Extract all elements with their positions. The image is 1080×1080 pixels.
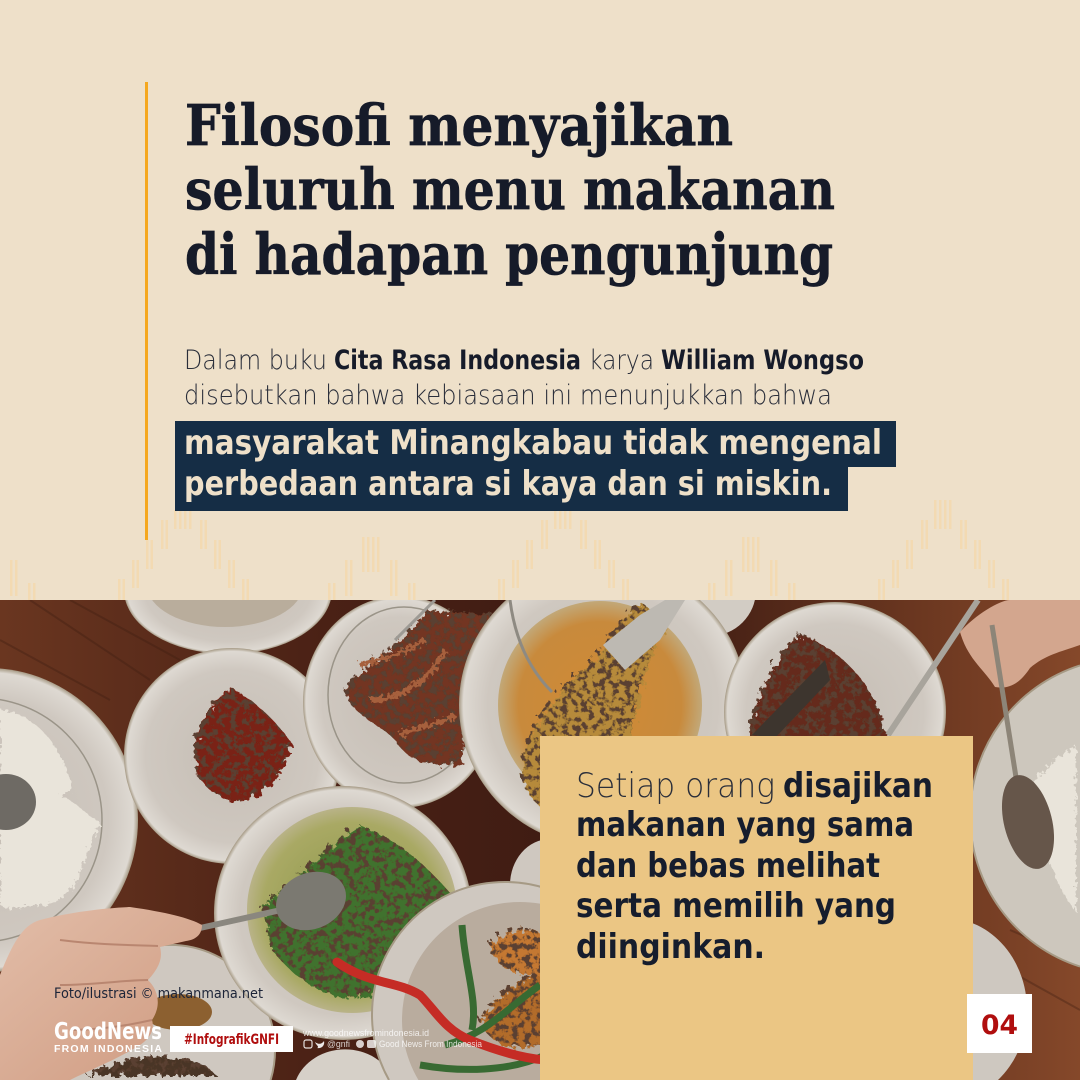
page number [967,994,1032,1053]
intro paragraph: William Wongso [661,345,864,376]
photo: Padang dishes on a wooden table [0,600,1080,1080]
hashtag badge [170,1026,293,1052]
intro paragraph: karya [589,345,654,376]
orange vertical accent bar [145,82,148,540]
plate: fried anchovies [303,596,497,808]
spoon: left hand [201,872,346,931]
plate: top left [125,600,331,652]
intro paragraph [184,345,864,411]
caption panel: serta memilih yang [576,886,896,926]
plate: small behind top [700,600,755,633]
plate: bottom centre small [296,1049,394,1080]
plate: bottom left [65,945,275,1080]
caption panel: disajikan [783,766,933,806]
plate: fish in orange curry [459,600,739,833]
highlighted statement: perbedaan antara si kaya dan si miskin. [184,464,832,504]
page number: 04 [981,1010,1018,1041]
plate: sambal [124,648,340,864]
intro paragraph: Cita Rasa Indonesia [334,345,581,376]
highlighted statement [175,421,896,511]
spoon: right plate [990,624,1054,869]
website and social links [302,1028,483,1050]
caption panel: dan bebas melihat [576,846,880,886]
caption panel [540,736,973,1080]
intro paragraph: Dalam buku [184,345,327,376]
stepped background pattern [0,500,1080,600]
title [185,93,835,288]
hand: top right [960,600,1080,688]
website and social links: Good News From Indonesia [379,1039,483,1050]
title: seluruh menu makanan [185,157,835,223]
caption panel: Setiap orang [576,766,775,806]
plate: vegetables and red chili [332,881,540,1080]
title: Filosofi menyajikan [185,93,733,159]
website and social links: @gnfi [327,1039,350,1050]
title: di hadapan pengunjung [185,222,833,288]
hashtag badge: #InfografikGNFI [184,1032,279,1048]
logo: GoodNews From Indonesia: FROM INDONESIA [54,1043,162,1055]
photo credit: Foto/ilustrasi © makanmana.net [54,986,263,1002]
plate: small behind green [510,840,540,886]
plate: left with rice [0,668,138,972]
website and social links: www.goodnewsfromindonesia.id [302,1028,429,1039]
caption panel: makanan yang sama [576,805,914,845]
plate: green curry [214,786,472,1040]
plate: bottom right behind panel [973,924,1026,1080]
logo: GoodNews From Indonesia: GoodNews [54,1019,162,1045]
highlighted statement: masyarakat Minangkabau tidak mengenal [184,423,882,463]
plate: eggplant balado [724,600,980,736]
hand: bottom left [0,907,202,1080]
background panel [0,0,1080,600]
plate: right with rice [970,666,1080,966]
intro paragraph: disebutkan bahwa kebiasaan ini menunjukkan bahwa [184,380,832,411]
logo: GoodNews From Indonesia [54,1019,162,1055]
fork [603,600,685,670]
caption panel: diinginkan. [576,927,765,967]
